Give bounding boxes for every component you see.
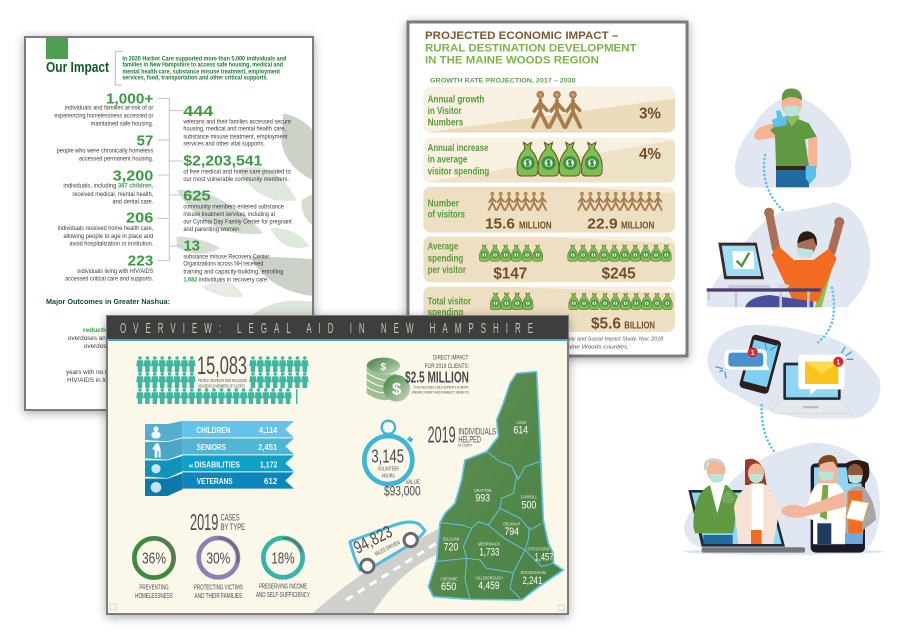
map: New Hampshire counties: CARROLL: [521, 495, 537, 501]
direct impact with coins: [367, 354, 469, 402]
panel: Our Impact document: [25, 37, 320, 410]
impact statistics: people who were chronically homeless: [57, 147, 153, 154]
impact statistics right column: our Cynthia Day Family Center for pregnant: [183, 218, 292, 225]
car: miles driven: MILES DRIVEN: [374, 540, 401, 558]
cases heading: CASES: [221, 513, 240, 523]
impact statistics: maintained safe housing.: [91, 121, 154, 128]
ribbon: veterans: [145, 472, 294, 496]
impact statistics: 57: [137, 133, 153, 150]
ribbon: veterans: VETERANS: [197, 476, 233, 486]
intro text: families in New Hampshire to access safe housing, medical and: [122, 62, 283, 69]
impact statistics right column: our most vulnerable community members.: [183, 176, 289, 183]
row: number of visitors: 22.9: [587, 216, 618, 232]
map: New Hampshire counties: CHESHIRE: [440, 576, 458, 582]
impact statistics: and dental care.: [112, 198, 154, 205]
header bar: OVERVIEW: LEGAL AID IN NEW HAMPSHIRE: [120, 321, 533, 337]
intro text: In 2020 Harbor Care supported more than 5,000 individuals and: [122, 55, 286, 62]
impact statistics right column: of free medical and home care provided to: [183, 168, 291, 175]
row: total visitor spending: $5.6: [591, 315, 621, 332]
row: annual increase in average visitor spending: in average: [428, 155, 468, 166]
stopwatch: volunteer hours: HOURS: [382, 473, 395, 479]
message bubble: [724, 347, 770, 370]
impact statistics right column: veterans and their families accessed secure: [183, 118, 291, 125]
row: annual growth in visitor numbers: 3%: [639, 105, 661, 122]
major outcomes partial text: 10%: [130, 312, 160, 329]
map: New Hampshire counties: 1,733: [479, 547, 499, 559]
map: New Hampshire counties: 500: [522, 499, 536, 511]
map: New Hampshire counties: 720: [444, 542, 458, 554]
stopwatch: volunteer hours: $93,000: [384, 483, 421, 499]
heading: individuals helped by county: INDIVIDUALS: [458, 426, 496, 436]
map: New Hampshire counties: HILLSBOROUGH: [475, 576, 503, 582]
row: average spending per visitor: [423, 237, 675, 282]
donut: 18 percent: AND SELF-SUFFICIENCY: [256, 590, 310, 599]
corner marker left: [110, 604, 116, 610]
ribbon: seniors: 2,451: [258, 442, 277, 452]
title: [425, 30, 637, 67]
donut: 36 percent: PREVENTING: [139, 582, 169, 591]
map: New Hampshire counties: GRAFTON: [474, 488, 492, 494]
major outcomes partial text: overdoses: [84, 343, 113, 350]
row: average spending per visitor: spending: [428, 253, 463, 264]
row: average spending per visitor: Average: [428, 242, 459, 253]
impact statistics: received medical, mental health,: [72, 191, 154, 198]
row: annual growth in visitor numbers: in Visitor: [428, 106, 462, 117]
row: annual increase in average visitor spending: [423, 138, 675, 183]
heading: major outcomes: Major Outcomes in Greater Nashua:: [46, 297, 170, 306]
people count pictogram: [136, 352, 308, 404]
row: total visitor spending: BILLION: [624, 320, 655, 331]
green header square: [46, 38, 68, 59]
row: number of visitors: of visitors: [428, 210, 465, 221]
cases heading: 2019: [190, 509, 218, 535]
donut: 30 percent: [194, 538, 243, 600]
impact statistics: experiencing homelessness accessed or: [54, 113, 153, 120]
row: annual increase in average visitor spending: $: [590, 159, 595, 168]
map: New Hampshire counties: 1,457: [535, 552, 553, 564]
ribbon: veterans: 612: [264, 476, 277, 486]
heading: Our Impact: Our Impact: [46, 60, 109, 76]
phone screen: [811, 463, 865, 553]
impact statistics: 206: [126, 210, 153, 227]
people count pictogram: HOUSEHOLD MEMBERS OF CLIENTS: [198, 384, 245, 388]
doctor in white coat: [803, 455, 847, 544]
impact statistics: avoid hospitalization or institution.: [69, 241, 154, 248]
ribbon: seniors: [145, 438, 294, 460]
impact statistics right column: 444: [183, 103, 214, 120]
donut: 36 percent: HOMELESSNESS: [135, 591, 173, 600]
direct impact with coins: $: [381, 362, 387, 373]
map: New Hampshire counties: BELKNAP: [503, 521, 520, 527]
impact statistics: 3,200: [113, 168, 153, 185]
map: New Hampshire counties: 2,241: [522, 575, 542, 587]
donut: 18 percent: PRESERVING INCOME: [259, 581, 307, 590]
map: New Hampshire counties: SULLIVAN: [443, 536, 460, 542]
panel contents in local coordinates: [423, 30, 675, 351]
row: total visitor spending: spending: [428, 308, 463, 319]
ribbon: disabilities: 1,172: [260, 459, 277, 469]
impact statistics: [54, 90, 183, 283]
direct impact with coins: (THIS INCLUDES CHILD SUPPORT, ALIMONY,: [414, 384, 469, 389]
donut: 36 percent: [134, 538, 174, 600]
impact statistics: accessed critical care and supports.: [65, 276, 154, 283]
map: New Hampshire counties: 993: [475, 493, 490, 505]
people count pictogram: 15,083: [197, 352, 247, 380]
impact statistics: 1,000+: [106, 90, 154, 107]
envelope bubble: [798, 354, 845, 395]
map: New Hampshire counties: 650: [441, 581, 456, 593]
source note: the Maine Woods counties.: [552, 345, 629, 351]
ribbon: disabilities: [145, 455, 294, 478]
subtitle: GROWTH RATE PROJECTION, 2017 – 2030: [430, 77, 576, 84]
direct impact with coins: DIRECT IMPACT: [433, 354, 468, 361]
row: annual increase in average visitor spending: $: [546, 159, 551, 168]
header bar: [107, 316, 568, 341]
2019 cases by type: [134, 509, 310, 600]
row: number of visitors: MILLION: [519, 220, 552, 231]
map: New Hampshire counties: 4,459: [478, 580, 500, 592]
impact statistics right column: community members entered substance: [183, 203, 284, 210]
heading: individuals helped by county: 2019: [428, 421, 456, 447]
intro text: services, food, transportation and other critical supports.: [122, 75, 268, 82]
donut: 18 percent: 18%: [271, 550, 295, 567]
impact statistics right column: 625: [183, 188, 211, 205]
map: New Hampshire counties: [428, 372, 563, 600]
panel: Overview Legal Aid in New Hampshire: [107, 316, 568, 614]
ribbon: children: [145, 421, 294, 441]
row: average spending per visitor: per visitor: [428, 265, 466, 276]
donut: 30 percent: PROTECTING VICTIMS: [194, 582, 243, 591]
illustration: delivery worker giving thumbs up: [735, 88, 852, 214]
map: New Hampshire counties: COOS: [516, 420, 527, 426]
illustration: patients meeting doctors through screens: [683, 443, 883, 555]
donut: 18 percent: [256, 538, 310, 599]
map: New Hampshire counties: ROCKINGHAM: [521, 570, 546, 576]
ribbon list: helped by group: [145, 421, 294, 496]
map: New Hampshire counties: 614: [513, 425, 528, 437]
cases heading: BY TYPE: [221, 522, 245, 532]
major outcomes partial text: reduction: [83, 327, 113, 334]
illustration: man celebrating at computer: [706, 202, 870, 320]
road: [313, 528, 440, 613]
laptop: [772, 363, 850, 413]
woman in cream coat: [734, 459, 782, 544]
ribbon: seniors: SENIORS: [197, 442, 226, 452]
map: New Hampshire counties: STRAFFORD: [527, 546, 550, 552]
panel: Projected Economic Impact: [408, 22, 687, 356]
row: annual growth in visitor numbers: Annual growth: [428, 94, 484, 105]
impact statistics right column: housing, medical and mental health care,: [183, 126, 286, 133]
laptop screen: [688, 490, 805, 553]
people count pictogram: PEOPLE HELPED IN 2019 INCLUDING: [198, 378, 247, 383]
source note: Economic and Social Impact Study. Nov. 2018: [552, 337, 664, 343]
impact statistics: individuals, including 387 children,: [63, 183, 154, 190]
handshake: [782, 492, 847, 518]
impact statistics: accessed permanent housing.: [79, 156, 154, 163]
stopwatch: volunteer hours: 3,145: [371, 446, 404, 467]
impact statistics right column: Organizations across NH received: [183, 261, 264, 268]
stopwatch: volunteer hours: VALUE:: [406, 479, 421, 486]
impact statistics right column: training and capacity-building, enrolling: [183, 268, 284, 275]
impact statistics right column: substance misuse treatment, employment: [183, 133, 288, 140]
panel right side contents: [350, 354, 563, 600]
impact statistics right column: 1,682 individuals in recovery care.: [183, 277, 269, 284]
row: number of visitors: Number: [428, 198, 459, 209]
source note: [552, 337, 664, 351]
envelope bubble: 1: [836, 357, 840, 366]
direct impact with coins: $: [392, 379, 402, 398]
impact statistics: allowing people to age in place and: [63, 233, 154, 240]
intro text: [115, 52, 286, 85]
title: IN THE MAINE WOODS REGION: [425, 55, 599, 67]
map: New Hampshire counties: 794: [504, 526, 519, 538]
title: RURAL DESTINATION DEVELOPMENT: [425, 43, 637, 55]
impact statistics right column: [183, 103, 292, 284]
intro text: mental health care, substance misuse treatment, employment: [122, 68, 281, 75]
row: number of visitors: 15.6: [485, 216, 515, 232]
row: total visitor spending: Total visitor: [428, 296, 471, 307]
ribbon: children: CHILDREN: [196, 425, 230, 435]
message bubble: 1: [751, 348, 755, 357]
impact statistics right column: substance misuse Recovery Center: [183, 253, 269, 260]
major outcomes partial text: years with no in: [66, 369, 110, 376]
map: New Hampshire counties: MERRIMACK: [478, 541, 500, 547]
row: annual increase in average visitor spending: visitor spending: [428, 166, 489, 177]
row: annual increase in average visitor spending: $: [568, 159, 573, 168]
impact statistics right column: 13: [183, 238, 200, 255]
stopwatch: volunteer hours: VOLUNTEER: [378, 467, 399, 473]
impact statistics: individuals received home health care,: [58, 225, 154, 232]
stopwatch: volunteer hours: [364, 421, 421, 499]
impact statistics: individuals living with HIV/AIDS: [77, 268, 153, 275]
direct impact with coins: UNEMPLOYMENT, AND DISABILITY BENEFITS: [412, 389, 469, 394]
donut: 30 percent: 30%: [206, 550, 231, 567]
row: average spending per visitor: $147: [493, 265, 527, 282]
illustration: phone and laptop notifications: [707, 322, 880, 466]
direct impact with coins: $2.5 MILLION: [405, 370, 469, 387]
row: total visitor spending: [423, 287, 675, 332]
corner marker right: [558, 605, 564, 611]
nurse with clipboard: [845, 460, 876, 544]
impact statistics right column: services and other vital supports.: [183, 141, 265, 148]
donut: 36 percent: 36%: [142, 551, 166, 568]
impact statistics right column: $2,203,541: [183, 153, 262, 170]
heading: individuals helped by county: HELPED: [458, 434, 481, 444]
direct impact with coins: FOR 2019 CLIENTS:: [425, 363, 469, 370]
impact statistics right column: and parenting women.: [183, 226, 241, 233]
row: average spending per visitor: $245: [602, 265, 636, 282]
major outcomes partial text: overdoses and: [68, 335, 110, 342]
row: annual increase in average visitor spending: 4%: [639, 146, 661, 163]
row: number of visitors: [423, 187, 675, 233]
car: miles driven: [350, 521, 425, 573]
impact statistics right column: misuse treatment services, including at: [183, 211, 275, 218]
row: annual growth in visitor numbers: Numbers: [428, 118, 464, 129]
car: miles driven: 94,823: [350, 521, 395, 558]
row: annual increase in average visitor spending: $: [525, 159, 530, 168]
ribbon: children: 4,114: [259, 425, 277, 435]
older man in green cardigan: [693, 459, 738, 544]
title: PROJECTED ECONOMIC IMPACT –: [425, 30, 618, 42]
impact statistics: individuals and families at-risk of or: [65, 104, 153, 111]
phone: [739, 334, 782, 395]
major outcomes partial text: [66, 312, 160, 384]
donut: 30 percent: AND THEIR FAMILIES: [194, 591, 242, 600]
heading: individuals helped by county: BY COUNTY: [458, 444, 473, 448]
row: number of visitors: MILLION: [621, 220, 654, 231]
impact statistics: 223: [128, 252, 153, 269]
ribbon: disabilities: W/ DISABILITIES: [189, 459, 240, 469]
decorative leaf background: [177, 113, 320, 323]
major outcomes partial text: HIV/AIDS in long: [67, 377, 115, 384]
row: annual growth in visitor numbers: [423, 87, 675, 133]
row: annual increase in average visitor spending: Annual increase: [428, 143, 489, 154]
